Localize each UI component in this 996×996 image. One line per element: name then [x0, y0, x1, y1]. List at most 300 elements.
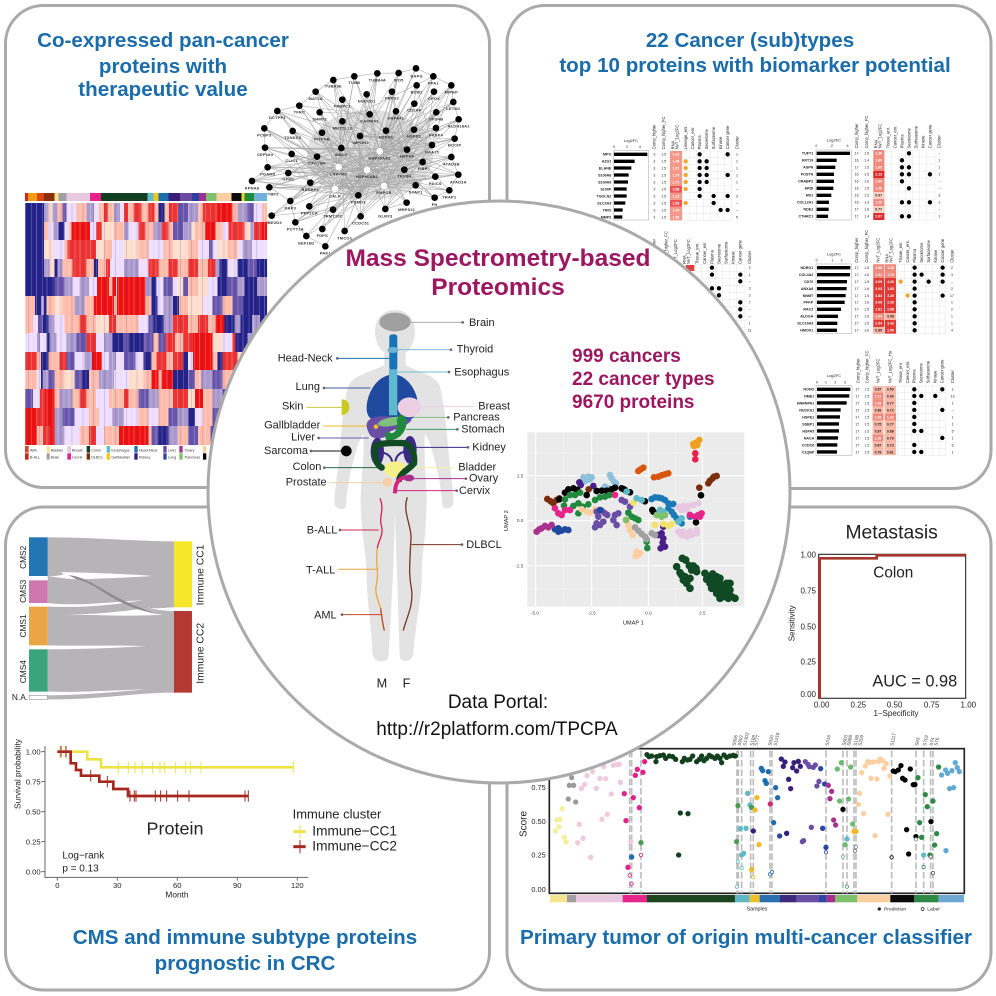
scatter y axis: 0.50: [531, 817, 546, 826]
table: top-left cancer type: 1.27: [673, 166, 679, 170]
network labels: CALR: [329, 193, 341, 198]
table: bottom-right cancer type: 1.29: [887, 415, 894, 419]
heatmap legend: B-ALL: [30, 455, 40, 459]
table: bottom-right cancer type: Kinase: [933, 370, 938, 383]
title: mass spectrometry proteomics: [345, 245, 651, 301]
organ: brain: [379, 313, 411, 331]
table: bottom-right cancer type: 1.09: [875, 415, 881, 419]
table: top-right cancer type: NvT_Log2FC: [877, 124, 882, 148]
ROC axis labels: 0.00: [814, 701, 830, 710]
scatter prediction points: [555, 755, 959, 870]
network labels: RANBP1: [302, 187, 320, 192]
UMAP grid: [527, 432, 744, 607]
misclassified sample labels: S902: [737, 734, 744, 746]
table: mid-right cancer type: 1.6: [864, 287, 869, 291]
table: top-left cancer type: MMP2: [601, 215, 611, 219]
table: mid-right cancer type: 0.85: [875, 329, 882, 333]
misclassified sample dashed lines: [630, 751, 933, 893]
table: bottom-right cancer type: NUCKS1: [799, 408, 814, 412]
organ: head-neck: [389, 334, 397, 370]
table: mid-right cancer type: 2.50: [887, 329, 894, 333]
table: mid-right cancer type: 1.04: [875, 315, 882, 319]
organ: kidneys and ureters: [371, 436, 417, 466]
table: top-left cancer type: 1.5: [661, 187, 666, 191]
heatmap fine stripe texture: [25, 203, 267, 445]
table: top-right cancer type: 1.5: [864, 166, 869, 170]
table: mid-left cancer type: 1: [749, 273, 751, 277]
table: top-right cancer type: 1.5: [864, 173, 869, 177]
table: top-left cancer type: 2: [626, 145, 628, 149]
scatter frame: [549, 749, 964, 893]
table: mid-right cancer type: 1: [951, 322, 953, 326]
table: bottom-right cancer type: NME1: [804, 394, 814, 398]
table: mid-right cancer type: 1.75: [887, 273, 894, 277]
table: mid-right cancer type: 2.58: [887, 308, 894, 312]
table: bottom-right cancer type: 0.90: [887, 394, 894, 398]
network labels: FIBP: [418, 166, 428, 171]
table: top-right cancer type: 1.25: [875, 201, 882, 205]
misclassified sample labels: S888: [846, 734, 853, 746]
network labels: TMCO1: [337, 235, 353, 240]
table: bottom-right cancer type: 2: [834, 380, 836, 384]
table: top-right cancer type: 1.36: [875, 152, 882, 156]
table: top-right cancer type: Cancer_enr.: [892, 126, 897, 148]
table: mid-right cancer type: 17: [855, 322, 859, 326]
UMAP axes: UMAP 1: [623, 621, 644, 627]
misclassified sample labels: S1303: [742, 732, 750, 746]
table: top-right cancer type: 16: [855, 201, 859, 205]
misclassified sample labels: S803: [841, 734, 849, 746]
misclassified sample labels: S702: [922, 734, 929, 746]
Sankey labels: [12, 544, 206, 702]
table: top-right cancer type: 3: [938, 194, 940, 198]
table: top-right cancer type: 1: [938, 159, 940, 163]
organ labels: Skin: [282, 401, 303, 413]
table: mid-right cancer type: Cancer gene: [940, 238, 945, 263]
table: bottom-right cancer type: 0.73: [887, 443, 894, 447]
network labels: IPO5: [394, 77, 404, 82]
title: CMS and immune: prognostic in CRC: [155, 952, 336, 975]
table: bottom-right cancer type: Plasma: [912, 369, 917, 383]
table: mid-right cancer type: Surfaceome: [926, 240, 931, 263]
table: top-left cancer type: Comp_higher_FC: [661, 117, 666, 149]
table: mid-right cancer type: 2: [951, 287, 953, 291]
table: mid-left cancer type: Cluster: [747, 250, 752, 264]
table: mid-left cancer type: NvT_Log2FC: [673, 239, 678, 264]
table: mid-right cancer type: 1.5: [864, 280, 869, 284]
Sankey CMS nodes: [29, 537, 48, 699]
title: mass spectrometry proteomics: Mass Spectrometry-based: [345, 245, 651, 272]
survival legend: [293, 806, 397, 853]
network labels: TRAP1: [442, 194, 457, 199]
table: top-right cancer type: KRT19: [802, 159, 813, 163]
table: top-right cancer type: Log2FC: [827, 137, 841, 142]
title: CMS and immune: [73, 926, 417, 975]
organ: skin: [342, 399, 349, 415]
table: top-left cancer type: Surfaceome: [711, 126, 716, 149]
biomarker protein tables: [596, 116, 955, 455]
organ: bladder: [384, 461, 406, 477]
log-rank annotation: [62, 850, 104, 875]
table: mid-right cancer type: Comp_higher: [854, 237, 859, 263]
network labels: HSPA8: [400, 154, 415, 159]
survival legend: Immune cluster: [293, 806, 382, 821]
survival axis labels: Survival probability: [13, 738, 23, 809]
misclassified sample labels: [731, 732, 940, 746]
table: mid-right cancer type: 1: [831, 258, 833, 262]
table: mid-left cancer type: Plasma: [709, 249, 714, 264]
table: top-right cancer type: 16: [855, 180, 859, 184]
network labels: CPOX: [428, 96, 440, 101]
table: bottom-right cancer type: NvT_Log2FC: [875, 359, 880, 383]
table: mid-right cancer type: 1.83: [887, 287, 894, 291]
table: mid-right cancer type: 17: [855, 301, 859, 305]
UMAP axes: -5.0: [531, 611, 539, 616]
table: top-right cancer type: ASPN: [803, 166, 814, 170]
organ: stomach: [385, 415, 406, 441]
table: mid-right cancer type: 17: [855, 266, 859, 270]
survival axis labels: 0.00: [26, 867, 41, 876]
network labels: TRPB4: [397, 174, 412, 179]
leader lines: [307, 322, 473, 615]
table: mid-right cancer type: 0: [816, 258, 818, 262]
table: top-left cancer type: 3: [653, 173, 655, 177]
table: mid-right cancer type: PFKP: [804, 301, 814, 305]
table: mid-right cancer type: 3.84: [875, 294, 882, 298]
heatmap legend: Kidney: [139, 455, 150, 459]
network labels: MIPEP: [445, 89, 458, 94]
table: mid-left cancer type: 2: [749, 266, 751, 270]
table: mid-right cancer type: 1.48: [887, 266, 894, 270]
table: bottom-right cancer type: 0.81: [887, 450, 894, 454]
network labels: CTBP2: [265, 191, 279, 196]
heatmap cancer type colour bar: [25, 193, 267, 201]
table: mid-right cancer type: Comp_higher_FC: [864, 230, 869, 263]
organ labels: Colon: [293, 461, 321, 473]
network labels: PAK1: [320, 251, 331, 256]
organ labels: Ovary: [469, 473, 499, 485]
organ: prostate: [383, 478, 392, 487]
table: mid-right cancer type: 1.81: [875, 308, 882, 312]
table: mid-right cancer type: 2.03: [875, 287, 882, 291]
network labels: ATAD3A: [450, 179, 467, 184]
table: mid-right cancer type: RAC2: [803, 308, 813, 312]
table: bottom-right cancer type: 6: [952, 443, 954, 447]
table: top-left cancer type: 4: [639, 145, 641, 149]
table: bottom-right cancer type: HNRNPA1: [797, 401, 814, 405]
Immune-CC1 censor ticks: [60, 746, 293, 773]
table: bottom-right cancer type: Cancer_enr.: [905, 361, 910, 383]
table: mid-right cancer type: HMOX1: [800, 329, 813, 333]
table: bottom-right cancer type: 0.75: [875, 422, 881, 426]
misclassified sample labels: S209: [857, 734, 865, 746]
table: top-right cancer type: 0: [815, 144, 817, 148]
table: top-left cancer type: Lineage_enr.: [683, 125, 688, 149]
ROC axis labels: [787, 551, 977, 718]
table: top-right cancer type: Cluster: [937, 135, 942, 148]
table: top-left cancer type: 1: [736, 173, 738, 177]
table: mid-left cancer type: –: [749, 315, 751, 319]
Immune-CC1 curve: [57, 752, 294, 767]
table: bottom-right cancer type: 1.5: [865, 450, 869, 454]
panel: classifier frame: [507, 507, 991, 990]
table: mid-right cancer type: COL4A2: [799, 273, 813, 277]
network labels: PSMD3: [351, 200, 366, 205]
network labels: NAA15: [425, 149, 440, 154]
table: top-left cancer type: Secretome: [704, 129, 709, 149]
table: top-left cancer type: 1.5: [661, 201, 666, 205]
Sankey labels: CMS4: [18, 660, 28, 683]
table: mid-right cancer type: Log2FC: [827, 251, 841, 256]
table: top-right cancer type: POSTN: [801, 173, 814, 177]
table: top-left cancer type: 3: [653, 208, 655, 212]
table: bottom-right cancer type: 17: [855, 408, 859, 412]
AUC value: AUC = 0.98: [872, 673, 957, 691]
table: top-left cancer type: 3: [653, 166, 655, 170]
blood: T-ALL: [376, 548, 381, 608]
network labels: BCCIP: [448, 143, 461, 148]
UMAP axes: [504, 473, 706, 627]
network labels: GLRX3: [378, 213, 393, 218]
table: bottom-right cancer type: 1: [952, 415, 954, 419]
organ labels: B-ALL: [307, 525, 337, 537]
title: biomarker proteins: top 10 proteins with biomarker potential: [559, 54, 951, 77]
table: bottom-right cancer type: Tissue_enr.: [898, 362, 903, 383]
network labels: TUBA3E: [325, 84, 342, 89]
survival axis labels: Month: [165, 890, 189, 900]
network labels: PMPCB: [376, 190, 392, 195]
table: top-right cancer type: 16: [855, 194, 859, 198]
network labels: FKBP4: [429, 132, 444, 137]
table: bottom-right cancer type: 17: [855, 422, 859, 426]
ROC axis labels: 0.25: [851, 701, 867, 710]
ROC axis labels: 0.50: [887, 701, 903, 710]
table: top-left cancer type: [596, 117, 739, 220]
network labels: DCTPP1: [269, 115, 286, 120]
network labels: PABPC1: [334, 103, 351, 108]
network labels: BZW2: [411, 89, 423, 94]
network labels: PPP2CA: [301, 210, 318, 215]
table: top-right cancer type: 1: [938, 166, 940, 170]
table: bottom-right cancer type: 17: [855, 443, 859, 447]
table: bottom-right cancer type: 1.5: [865, 415, 869, 419]
table: bottom-right cancer type: 1.11: [875, 394, 881, 398]
table: top-left cancer type: 3: [653, 187, 655, 191]
ROC axis labels: 0.00: [800, 690, 817, 699]
network labels: PGAM5: [260, 171, 276, 176]
heatmap legend: Pancreas: [185, 455, 200, 459]
table: top-right cancer type: CTHRC1: [798, 215, 813, 219]
table: mid-right cancer type: 4: [951, 329, 953, 333]
network nodes: [252, 68, 459, 246]
table: top-left cancer type: 1: [736, 166, 738, 170]
table: bottom-right cancer type: 0.87: [875, 443, 881, 447]
table: top-right cancer type: –: [938, 208, 940, 212]
organ: gallbladder: [374, 424, 378, 429]
table: mid-right cancer type: 17: [855, 287, 859, 291]
network labels: KPNA6: [245, 185, 260, 190]
misclassified sample labels: S63: [914, 737, 921, 746]
table: top-left cancer type: 1: [736, 160, 738, 164]
table: top-left cancer type: Cluster: [734, 136, 739, 149]
table: top-left cancer type: 3: [653, 194, 655, 198]
network dense core shading: [307, 110, 433, 200]
table: mid-right cancer type: Plasma: [912, 248, 917, 263]
table: mid-right cancer type: NNMT: [803, 294, 814, 298]
network labels: FDPS: [317, 233, 328, 238]
scatter legend: [878, 907, 939, 913]
network labels: PPA1: [428, 80, 439, 85]
organ labels: T-ALL: [306, 564, 335, 576]
table: bottom-right cancer type: HSPA5: [802, 429, 814, 433]
table: top-right cancer type: 2: [831, 144, 833, 148]
table: mid-left cancer type: Surfaceome: [723, 241, 728, 264]
heatmap legend: Gallbladder: [111, 455, 131, 459]
table: top-left cancer type: S100A8: [598, 173, 611, 177]
survival axis labels: 120: [291, 881, 304, 890]
table: bottom-right cancer type: 1: [952, 388, 954, 392]
table: top-right cancer type: –: [938, 187, 940, 191]
network labels: HSPH1: [379, 135, 394, 140]
organ labels: Gallbladder: [264, 419, 321, 431]
misclassified sample labels: S920: [767, 734, 775, 746]
heatmap legend: Esophagus: [111, 449, 130, 453]
table: bottom-right cancer type: 17: [855, 388, 859, 392]
table: top-left cancer type: 1.5: [661, 166, 666, 170]
table: top-left cancer type: 1.5: [661, 180, 666, 184]
table: top-right cancer type: 1.3: [864, 194, 869, 198]
table: mid-left cancer type: Cancer gene: [738, 239, 743, 264]
network labels: TUBB: [348, 80, 360, 85]
table: mid-right cancer type: 2.54: [875, 322, 882, 326]
network labels: PAICS: [429, 181, 442, 186]
table: top-left cancer type: 5: [736, 215, 738, 219]
table: mid-right cancer type: 1.6: [864, 315, 869, 319]
cohort statistics: 22 cancer types: [572, 369, 715, 390]
table: mid-right cancer type: ANXA6: [801, 287, 813, 291]
table: top-right cancer type: 16: [855, 159, 859, 163]
log-rank annotation: Log−rank: [62, 850, 104, 861]
table: top-right cancer type: TUFT1: [802, 152, 813, 156]
table: top-left cancer type: MPO: [603, 153, 611, 157]
network labels: MALZ: [335, 152, 348, 157]
scatter y axis: 0.25: [531, 851, 546, 860]
table: mid-right cancer type: 3.42: [887, 322, 894, 326]
scatter legend: Prediction: [884, 907, 906, 913]
table: top-right cancer type: COL12A1: [797, 201, 813, 205]
Sankey: CMS to immune subtype: [12, 537, 206, 702]
table: bottom-right cancer type: 1.03: [875, 401, 881, 405]
table: mid-right cancer type: 2: [951, 266, 953, 270]
table: top-left cancer type: 1.04: [673, 208, 679, 212]
ROC axis labels: 0.75: [800, 587, 817, 596]
table: top-right cancer type: –: [938, 152, 940, 156]
table: top-left cancer type: 3: [653, 215, 655, 219]
UMAP axes: -2.5: [588, 611, 596, 616]
misclassified sample labels: S1016: [773, 732, 781, 746]
network labels: ALDH18A1: [448, 124, 470, 129]
ROC axis labels: 0.50: [800, 622, 817, 631]
table: top-left cancer type: ELANE: [599, 166, 612, 170]
organ labels: M: [377, 676, 387, 690]
table: mid-right cancer type: 1.5: [864, 294, 869, 298]
network labels: CACYBP: [308, 161, 326, 166]
table: bottom-right cancer type: 0.79: [887, 436, 894, 440]
table: top-right cancer type: 1.59: [875, 180, 882, 184]
table: top-right cancer type: Tissue_enr.: [886, 127, 891, 148]
table: top-left cancer type: 1.5: [661, 208, 666, 212]
table: top-left cancer type: 1: [736, 153, 738, 157]
organ: esophagus: [389, 369, 397, 415]
scatter y axis: [519, 783, 546, 894]
scatter x axis label: Samples: [747, 906, 768, 912]
ROC axis labels: 1.00: [961, 701, 977, 710]
table: bottom-right cancer type: CCDC6: [802, 443, 814, 447]
table: mid-right cancer type: CD70: [804, 280, 813, 284]
title: mass spectrometry proteomics: Proteomics: [431, 274, 565, 301]
network labels: FH: [432, 202, 438, 207]
table: mid-left cancer type: RNA_: [682, 252, 687, 264]
organ: lung: [367, 375, 418, 420]
data portal: Data Portal:: [448, 692, 548, 713]
scatter y axis: Score: [519, 811, 530, 837]
Sankey labels: N.A.: [12, 692, 28, 702]
table: top-right cancer type: 2.23: [875, 173, 882, 177]
table: bottom-right cancer type: 0.77: [887, 401, 894, 405]
table: bottom-right cancer type: 1.36: [875, 436, 881, 440]
table: top-left cancer type: 3: [653, 160, 655, 164]
heatmap rows: [25, 203, 268, 445]
table: top-left cancer type: Cancer_enr.: [690, 127, 695, 149]
ROC axis labels: 0.25: [800, 657, 817, 666]
table: top-right cancer type: 1.3: [864, 201, 869, 205]
misclassified sample labels: S189: [749, 734, 757, 746]
Sankey labels: Immune CC2: [195, 623, 206, 684]
table: bottom-right cancer type: SSBP1: [802, 422, 814, 426]
Immune-CC2 curve: [57, 752, 248, 796]
table: top-left cancer type: 1.73: [673, 173, 679, 177]
table: top-left cancer type: 1.46: [673, 160, 679, 164]
table: mid-right cancer type: NvT_Log2FC: [889, 238, 894, 263]
network labels: MRPS21: [398, 207, 416, 212]
network labels: HSP90AB1: [356, 174, 379, 179]
data portal: http://r2platform.com/TPCPA: [376, 719, 618, 740]
network labels: SHMT2: [312, 116, 327, 121]
table: bottom-right cancer type: 0.89: [875, 408, 881, 412]
scatter y axis: 0.00: [531, 885, 546, 894]
table: mid-right cancer type: 4.20: [887, 280, 894, 284]
table: top-left cancer type: Kinase: [718, 136, 723, 149]
table: top-left cancer type: Comp_higher: [652, 124, 657, 149]
table: mid-right cancer type: Cancer_enr.: [905, 240, 910, 263]
ROC axis labels: 1.00: [800, 551, 817, 560]
network labels: HSP90AA1: [369, 155, 391, 160]
table: bottom-right cancer type: 1: [952, 450, 954, 454]
UMAP axes: 2.5: [699, 611, 706, 616]
table: top-right cancer type: 4: [847, 144, 849, 148]
table: mid-left cancer type: Cancer_enr.: [702, 241, 707, 264]
heatmap legend: Brain: [51, 455, 59, 459]
table: top-right cancer type: Kinase: [920, 135, 925, 148]
UMAP axes: -2.5: [515, 563, 524, 568]
title: biomarker proteins: 22 Cancer (sub)types: [646, 29, 854, 52]
table: mid-right cancer type: NvT_Log2FC: [875, 238, 880, 263]
table: mid-right cancer type: NDRG1: [800, 266, 813, 270]
table: top-right cancer type: [797, 116, 942, 220]
table: mid-right cancer type: 1.5: [864, 322, 869, 326]
survival axis labels: 60: [173, 881, 182, 890]
table: bottom-right cancer type: 17: [855, 394, 859, 398]
